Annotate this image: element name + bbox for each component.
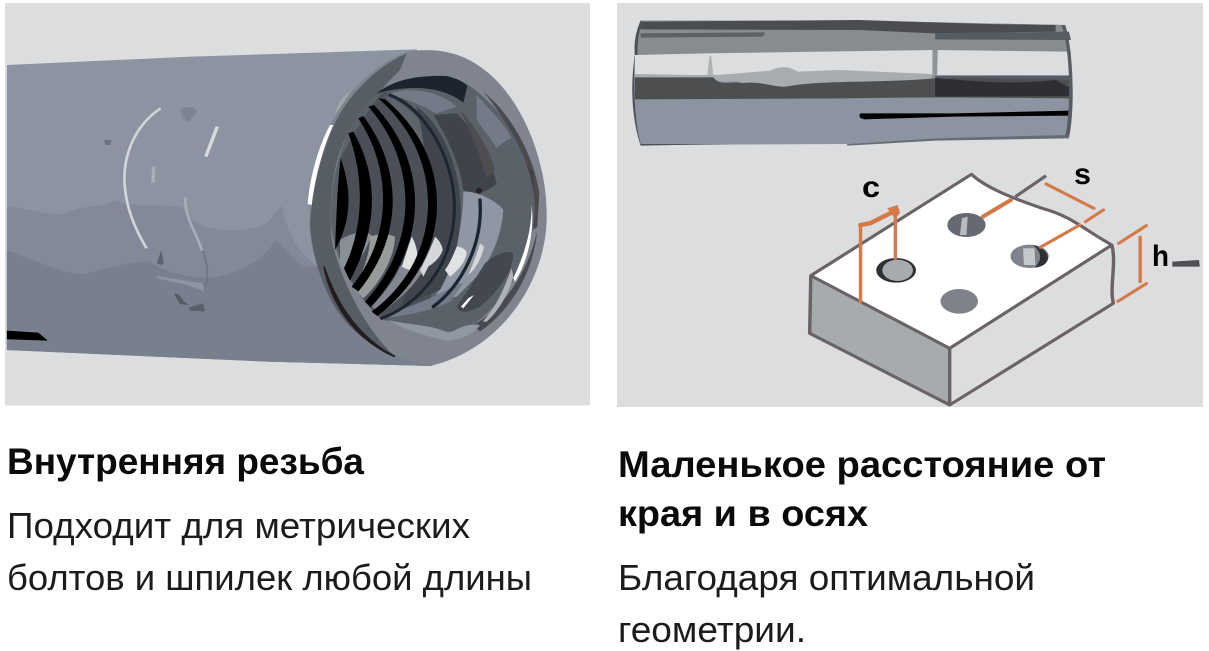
tube mouth with thread [308,50,547,366]
concrete block with hole spacing [810,174,1200,405]
label: c: c [862,171,880,204]
text: geometry description: Благодаря оптимальной [618,557,1035,598]
label: h: h [1152,240,1169,273]
thread highlights [402,237,417,270]
panel: internal thread photo [5,3,590,406]
thread grooves [335,98,437,316]
lower thread flanks [340,233,372,273]
heading: small edge distance [618,444,1106,534]
text: internal thread description [7,505,532,598]
heading: internal thread: Внутренняя резьба [7,441,364,482]
text: geometry description: геометрии. [618,609,806,650]
anchor sleeve illustration [632,20,1073,146]
heading: small edge distance: края и в осях [618,493,868,534]
text: internal thread description: болтов и шпилек любой длины [7,557,532,598]
text: internal thread description: Подходит для метрических [7,505,470,546]
label: s: s [1074,158,1091,191]
holes [947,213,986,237]
heading: small edge distance: Маленькое расстояние от [618,444,1106,485]
thread body [335,92,457,318]
text: geometry description [618,557,1035,650]
inner opening [331,76,535,332]
orange dimension lines [861,184,1146,302]
panel: edge distance diagram [617,3,1203,407]
tube body [7,49,432,366]
